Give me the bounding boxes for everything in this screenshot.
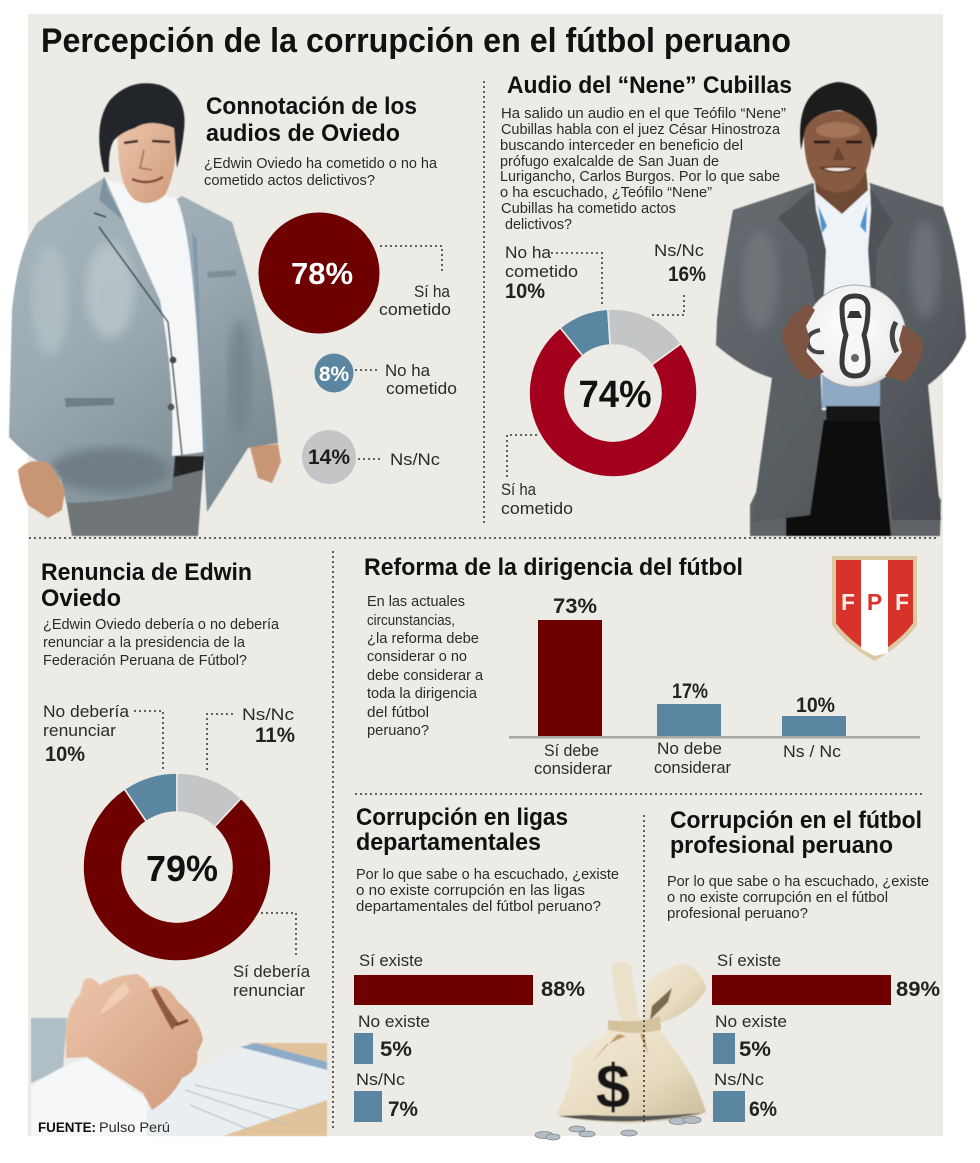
bar: sí existe 88%: 88% [541,978,585,1001]
panel: reforma de la dirigencia [364,554,920,778]
question text: ¿la reforma debe [367,631,479,647]
bar: no existe 5% [354,1012,430,1064]
shirt [814,185,880,410]
bar: ns/nc 6% [713,1070,777,1122]
label: sí debería renunciar: renunciar [233,981,305,1000]
label: no debería renunciar [43,702,163,770]
heading: Oviedo [41,585,121,612]
bar: no existe 5%: 5% [739,1038,771,1061]
bar: sí existe 88% [354,951,585,1005]
label: no ha cometido [505,243,602,305]
bar: ns/nc 10%: Ns / Nc [783,742,842,761]
hand left [782,304,824,380]
question text: Cubillas habla con el juez César Hinostroza [501,122,781,138]
label: sí debería renunciar: Sí debería [233,962,311,981]
question text: debe considerar a [367,668,484,684]
question text: ¿Edwin Oviedo ha cometido o no ha [204,156,438,172]
donut chart: 79% [83,773,271,961]
bar: no debe considerar 17% [654,680,731,777]
label: ns/nc: Ns/Nc [654,241,705,260]
bar: no existe 5%: 5% [380,1038,412,1061]
bar: ns/nc 7%: Ns/Nc [356,1070,406,1089]
lapels [778,188,826,340]
heading [356,804,568,856]
bar: sí existe 88%: Sí existe [359,951,423,970]
icon: coins [535,1116,701,1140]
bubble: 8% [314,354,354,392]
question text: toda la dirigencia [367,686,478,702]
heading [206,93,417,147]
question text: Ha salido un audio en el que Teófilo “Nene” [501,106,786,122]
question text: o no existe corrupción en el fútbol [667,890,888,906]
bar: no existe 5%: No existe [715,1012,787,1031]
photo: praying hands over document [31,974,327,1136]
donut value: 79% [146,848,218,889]
heading: Audio del “Nene” Cubillas [507,72,792,99]
bar: sí existe 89% [712,951,940,1005]
hair [99,83,184,172]
question text: prófugo exalcalde de San Juan de [500,154,719,170]
icon: FPF shield [832,556,917,661]
question text: profesional peruano? [667,906,808,922]
bar: sí debe considerar 73%: 73% [553,595,597,618]
bar: sí debe considerar 73%: Sí debe [544,741,599,760]
label: no debería renunciar: 10% [45,743,85,766]
heading: Corrupción en el fútbol [670,807,922,834]
neck [814,170,868,214]
bar chart [509,595,920,778]
label: ns/nc: Ns/Nc [242,705,295,724]
bubble: 8%: 8% [319,363,349,386]
question text [356,867,619,915]
bar: sí debe considerar 73%: considerar [534,759,612,778]
hand right [885,325,923,382]
title: Percepción de la corrupción en el fútbol peruano [41,22,791,60]
question text [367,594,484,739]
photo: Teófilo Cubillas [716,82,966,536]
question text [43,617,280,669]
label: sí ha cometido: cometido [501,499,573,518]
question text: Federación Peruana de Fútbol? [43,653,247,669]
label: sí ha cometido [501,435,573,518]
face [804,111,873,192]
question text: Por lo que sabe o ha escuchado, ¿existe [356,867,619,883]
photo: Edwin Oviedo [9,83,281,536]
icon: FPF shield: P [867,589,882,615]
label: no ha cometido [356,361,457,398]
label: ns/nc [652,241,706,315]
question text: En las actuales [367,594,465,610]
question text: Cubillas ha cometido actos [501,201,676,217]
trousers [66,455,204,536]
bar: ns/nc 7% [354,1070,418,1122]
icon: FPF shield: F [895,589,909,615]
question text: renunciar a la presidencia de la [43,635,246,651]
bubble: 14% [302,430,356,484]
bar: no existe 5% [713,1012,787,1064]
label: ns/nc: 11% [255,724,295,747]
bubble: 78% [258,212,380,334]
question text: peruano? [367,723,429,739]
jacket shading [86,242,134,338]
face [118,119,176,203]
question text: delictivos? [505,217,572,233]
heading [670,807,922,859]
heading [41,559,252,612]
panel: corrupción en el fútbol profesional [667,807,940,1122]
label: no ha cometido: 10% [505,280,545,303]
question text: considerar o no [367,649,467,665]
pockets and buttons [65,398,114,407]
label: no debería renunciar: No debería [43,702,130,721]
panel: audio del nene cubillas [500,72,792,518]
source: FUENTE: [38,1119,96,1135]
label: sí debería renunciar [233,913,311,1000]
label: no ha cometido: cometido [386,379,457,398]
jacket [9,178,278,512]
heading: Connotación de los [206,93,417,120]
question text [204,156,438,189]
question text: circunstancias, [367,613,455,629]
source [38,1119,170,1135]
question text [667,874,929,922]
panel: corrupción en ligas departamentales [354,804,619,1122]
bar: ns/nc 7%: 7% [388,1098,418,1121]
bar: no debe considerar 17%: 17% [672,680,708,703]
question text: ¿Edwin Oviedo debería o no debería [43,617,280,633]
icon: FPF shield: F [841,589,855,615]
donut value: 74% [578,374,652,416]
heading: departamentales [356,829,541,856]
bar: ns/nc 6%: Ns/Nc [714,1070,765,1089]
question text: Lurigancho, Carlos Burgos. Por lo que sabe [500,169,780,185]
bar: no debe considerar 17%: considerar [654,758,731,777]
question text: Por lo que sabe o ha escuchado, ¿existe [667,874,929,890]
label: sí ha cometido: Sí ha [414,282,450,301]
trousers [750,400,941,536]
bar: no debe considerar 17%: No debe [657,739,722,758]
icon: soccer ball [782,285,923,387]
heading: Renuncia de Edwin [41,559,252,586]
label: ns/nc: 16% [668,263,706,286]
panel: renuncia de edwin oviedo [41,559,311,1000]
source: Pulso Perú [99,1119,170,1135]
bubble: 78%: 78% [291,256,353,291]
question text: departamentales del fútbol peruano? [356,899,601,915]
hands [18,461,65,518]
label: no ha cometido: No ha [385,361,431,380]
question text: o ha escuchado, ¿Teófilo “Nene” [500,185,712,201]
label: ns/nc: Ns/Nc [390,450,441,469]
label: sí ha cometido [379,246,451,319]
lapel line [99,227,182,455]
bar: sí existe 89%: Sí existe [717,951,781,970]
bar: sí debe considerar 73% [534,595,612,778]
hair [800,82,877,150]
bar: ns/nc 10% [782,694,846,761]
heading: audios de Oviedo [206,120,400,147]
jacket [716,183,966,522]
bar: ns/nc 10%: 10% [796,694,835,717]
donut chart: 74% [529,309,697,477]
question text: o no existe corrupción en las ligas [356,883,585,899]
label: sí ha cometido: cometido [379,300,451,319]
question text [500,106,786,233]
bar: sí existe 89%: 89% [896,978,940,1001]
label: no ha cometido: cometido [505,262,578,281]
bar: no existe 5%: No existe [358,1012,430,1031]
label: ns/nc [359,450,441,469]
shirt [106,180,203,456]
bar: ns/nc 6%: 6% [749,1098,777,1121]
bubble: 14%: 14% [308,446,350,469]
question text: del fútbol [367,705,429,721]
label: sí ha cometido: Sí ha [501,480,536,499]
icon: money bag [556,962,706,1123]
label: ns/nc [207,705,295,772]
icon: money bag: $ [596,1053,630,1122]
heading: profesional peruano [670,832,893,859]
label: no debería renunciar: renunciar [43,721,116,740]
heading: Corrupción en ligas [356,804,568,831]
question text: buscando interceder en beneficio del [500,138,743,154]
label: no ha cometido: No ha [505,243,552,262]
question text: cometido actos delictivos? [204,173,375,189]
panel: connotación de los audios [204,93,457,484]
heading: Reforma de la dirigencia del fútbol [364,554,743,581]
